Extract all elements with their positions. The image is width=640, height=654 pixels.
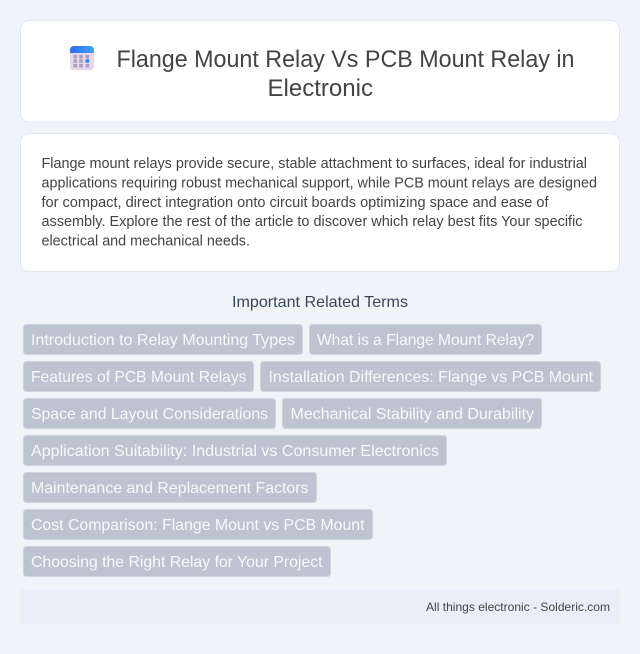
tag: choosing the right relay: [24, 546, 330, 576]
panel: description: for compact, direct integration onto circuit boards optimizing space and ease of: [42, 195, 550, 211]
tag: application suitability: Application Suitability: Industrial vs Consumer Electronics: [31, 443, 439, 460]
tag: choosing the right relay: Choosing the Right Relay for Your Project: [31, 554, 323, 571]
tag list: [24, 324, 600, 576]
tag: mechanical stability: Mechanical Stability and Durability: [290, 406, 534, 423]
panel: header: [20, 20, 620, 122]
tag: space and layout: Space and Layout Considerations: [31, 406, 268, 423]
tag: mechanical stability: [282, 398, 542, 428]
panel: description: [20, 134, 620, 272]
footer: [20, 590, 620, 624]
title: Electronic: [268, 75, 373, 102]
tag: cost comparison: Cost Comparison: Flange Mount vs PCB Mount: [31, 517, 365, 534]
tag: application suitability: [24, 436, 446, 466]
tag: what is a flange mount relay: [310, 324, 542, 354]
tag: introduction: Introduction to Relay Mounting Types: [31, 332, 295, 349]
title: [116, 46, 574, 102]
panel: description: Flange mount relays provide secure, stable attachment to surfaces, ideal for industrial: [42, 156, 587, 172]
tag: maintenance: [24, 472, 316, 502]
tag: introduction: [24, 324, 302, 354]
panel: description: electrical and mechanical needs.: [42, 234, 250, 250]
tag: features: Features of PCB Mount Relays: [31, 369, 246, 386]
panel: description: applications requiring robust mechanical support, while PCB mount relays are designed: [42, 176, 597, 192]
tag: what is a flange mount relay: What is a Flange Mount Relay?: [317, 332, 534, 349]
tag: cost comparison: [24, 510, 372, 540]
icon: calendar: [70, 46, 94, 70]
tag: maintenance: Maintenance and Replacement Factors: [31, 480, 308, 497]
tag: features: [24, 362, 254, 392]
footer: All things electronic - Solderic.com: [426, 600, 610, 614]
tag: space and layout: [24, 398, 276, 428]
heading: important related terms: Important Related Terms: [232, 294, 408, 311]
panel: description: assembly. Explore the rest of the article to discover which relay best fits Your specific: [42, 214, 582, 230]
tag: installation differences: Installation Differences: Flange vs PCB Mount: [268, 369, 594, 386]
tag: installation differences: [260, 362, 600, 392]
title: Flange Mount Relay Vs PCB Mount Relay in: [116, 46, 574, 73]
